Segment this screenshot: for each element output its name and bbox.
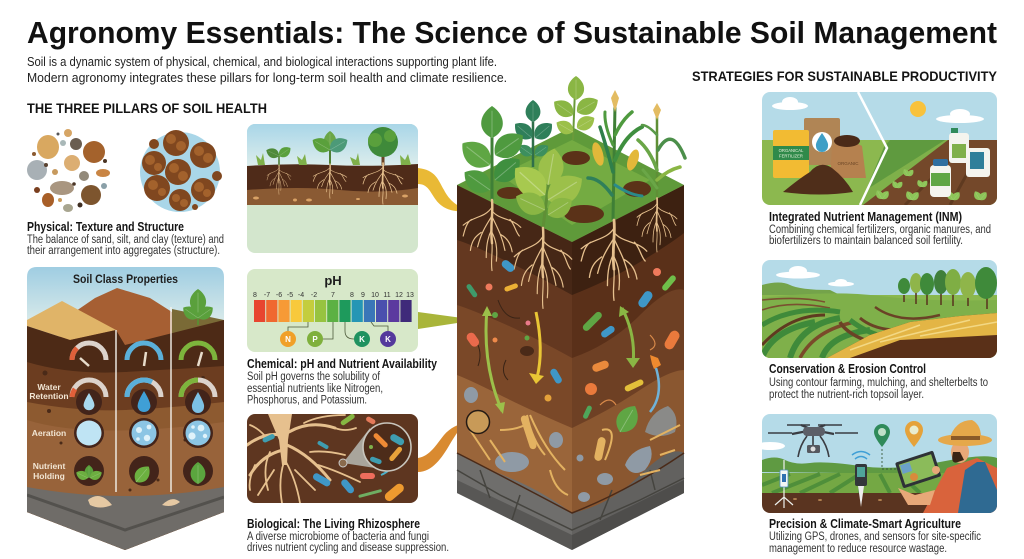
text: biological [247,517,449,554]
text: INM: Integrated Nutrient Management (INM) [769,210,962,224]
panel: integrated nutrient management [762,92,997,205]
icon: soil texture particles [27,129,110,212]
arrow: yellow downward [536,312,540,378]
text: INM: biofertilizers to maintain balanced soil fertility. [769,235,963,247]
ph scale numbers: -5 [287,292,293,299]
magnifier on block [466,410,490,434]
text: conservation: protect the nutrient-rich topsoil layer. [769,389,924,401]
clouds [776,266,854,286]
panel: conservation [762,260,997,358]
stones and deep roots [464,387,680,502]
soil microbes left [465,258,563,402]
icon: drone [768,425,858,457]
icon: seedlings rows [874,168,989,202]
icon: bottles [930,128,990,197]
row label: nutrient holding: Holding [33,471,65,481]
row label: nutrient holding [33,461,65,481]
ph scale numbers: 8 [350,292,354,299]
icon: yellow fertilizer bag [773,130,809,178]
column dividers [116,307,171,492]
ph scale numbers: 11 [383,292,391,299]
text: chemical: essential nutrients like Nitrogen, [247,383,383,395]
icon: compost heap [783,165,853,194]
ph scale numbers: -4 [298,292,304,299]
ph scale numbers: 12 [395,292,403,299]
plant: front light green [506,146,589,308]
text: precision: Utilizing GPS, drones, and sensors for site-specific [769,531,981,543]
icon: brown bag with drop [804,118,840,165]
row label: water retention: Water [37,382,61,392]
intro text [27,54,507,85]
nutrient markers: P [312,335,318,344]
icon: soil aggregates [140,130,222,212]
central soil block [455,76,685,550]
ph title: pH [324,273,342,288]
ph scale numbers: 10 [371,292,379,299]
gauges and drops row 2 [72,380,215,415]
text: precision [769,517,981,555]
title: Agronomy Essentials: The Science of Sustainable Soil Management [27,15,997,50]
nutrient connectors [288,322,388,339]
left face layers [457,185,572,550]
icon: shelterbelt trees [898,267,997,309]
panel: plant growth [247,124,418,253]
ph scale numbers: 8 [253,292,257,299]
text: precision: management to reduce resource wastage. [769,543,947,555]
plant: corn short [637,103,685,252]
text: chemical: Soil pH governs the solubility of [247,371,381,383]
ph scale numbers: 9 [361,292,365,299]
text: physical: their arrangement into aggregates (structure). [27,245,220,257]
icon: seedling [264,144,293,194]
icon: GPS pins [874,421,923,469]
panel: precision agriculture [755,414,997,513]
farmer [923,420,997,513]
icon: soil sensor [852,452,870,507]
soil microbes right [581,268,681,420]
row label: nutrient holding: Nutrient [33,461,65,471]
icon: yellow fertilizer bag: FERTILIZER [779,154,803,158]
text: biological: drives nutrient cycling and disease suppression. [247,542,449,554]
heading: three pillars: THE THREE PILLARS OF SOIL HEALTH [27,100,267,116]
text: physical [27,220,224,257]
microbes [262,413,406,503]
plant: back dark teal [510,100,557,167]
arrow: orange ribbon to block [418,423,466,472]
ph scale numbers [253,292,414,299]
icon: weather station [775,460,793,508]
plant: back lime [550,76,602,140]
icon: grass tufts [256,153,411,165]
icon: organic sack [830,135,866,178]
text: precision: Precision & Climate-Smart Agriculture [769,517,961,531]
gauges row 1 [72,343,215,366]
right face layers [572,185,684,550]
text: physical: Physical: Texture and Structure [27,220,184,234]
text: chemical: Phosphorus, and Potassium. [247,394,367,406]
text: INM [769,210,991,247]
arrow: green cycling right [622,308,634,364]
ph scale numbers: -6 [276,292,282,299]
top grass surface [457,127,684,242]
text: conservation [769,362,988,401]
nutrient markers: N [285,335,291,344]
panel: pH chart [247,269,418,352]
tablet [895,450,941,505]
arrow: yellow ribbon to block [418,168,470,211]
icon: organic sack: ORGANIC [837,161,859,166]
intro text: Soil is a dynamic system of physical, chemical, and biological interactions supporting plant life. [27,54,497,69]
intro text: Modern agronomy integrates these pillars for long-term soil health and climate resilience. [27,70,507,85]
text: biological: A diverse microbiome of bacteria and fungi [247,531,429,543]
soil class title: Soil Class Properties [73,272,178,286]
icon: tree [363,127,403,204]
ph colour bar [254,300,412,322]
text: physical: The balance of sand, silt, and clay (texture) and [27,234,224,246]
plant: left broadleaf [455,106,529,271]
text: biological: Biological: The Living Rhizosphere [247,517,420,531]
nutrient leaf circles [74,456,213,486]
nutrient markers: K [359,335,365,344]
panel: rhizosphere [247,413,418,503]
ph scale numbers: -7 [264,292,270,299]
icon: yellow fertilizer bag: ORGANICAL [779,148,804,153]
ph scale numbers: 7 [331,292,335,299]
row label: water retention: Retention [29,391,69,401]
icon: sun [910,101,926,117]
arrow: green cycling left [486,309,502,411]
nutrient markers: K [385,335,391,344]
nutrient markers [280,331,396,347]
ph scale numbers: 13 [406,292,414,299]
icon: small plant [180,289,216,325]
ph scale numbers: -2 [311,292,317,299]
arrow: olive pointer to block [418,312,477,329]
text: conservation: Conservation & Erosion Control [769,362,926,376]
row label: water retention [29,382,69,401]
heading: strategies: STRATEGIES FOR SUSTAINABLE PRODUCTIVITY [692,68,998,84]
aeration circles [74,418,213,448]
magnifier [339,423,411,471]
panel: soil class properties [27,267,224,559]
icon: young plant [309,131,351,198]
rock cracks [457,470,684,530]
plant: corn tall [581,90,647,300]
row label: aeration: Aeration [32,428,66,438]
text: chemical [247,357,437,406]
text: chemical: Chemical: pH and Nutrient Availability [247,357,437,371]
